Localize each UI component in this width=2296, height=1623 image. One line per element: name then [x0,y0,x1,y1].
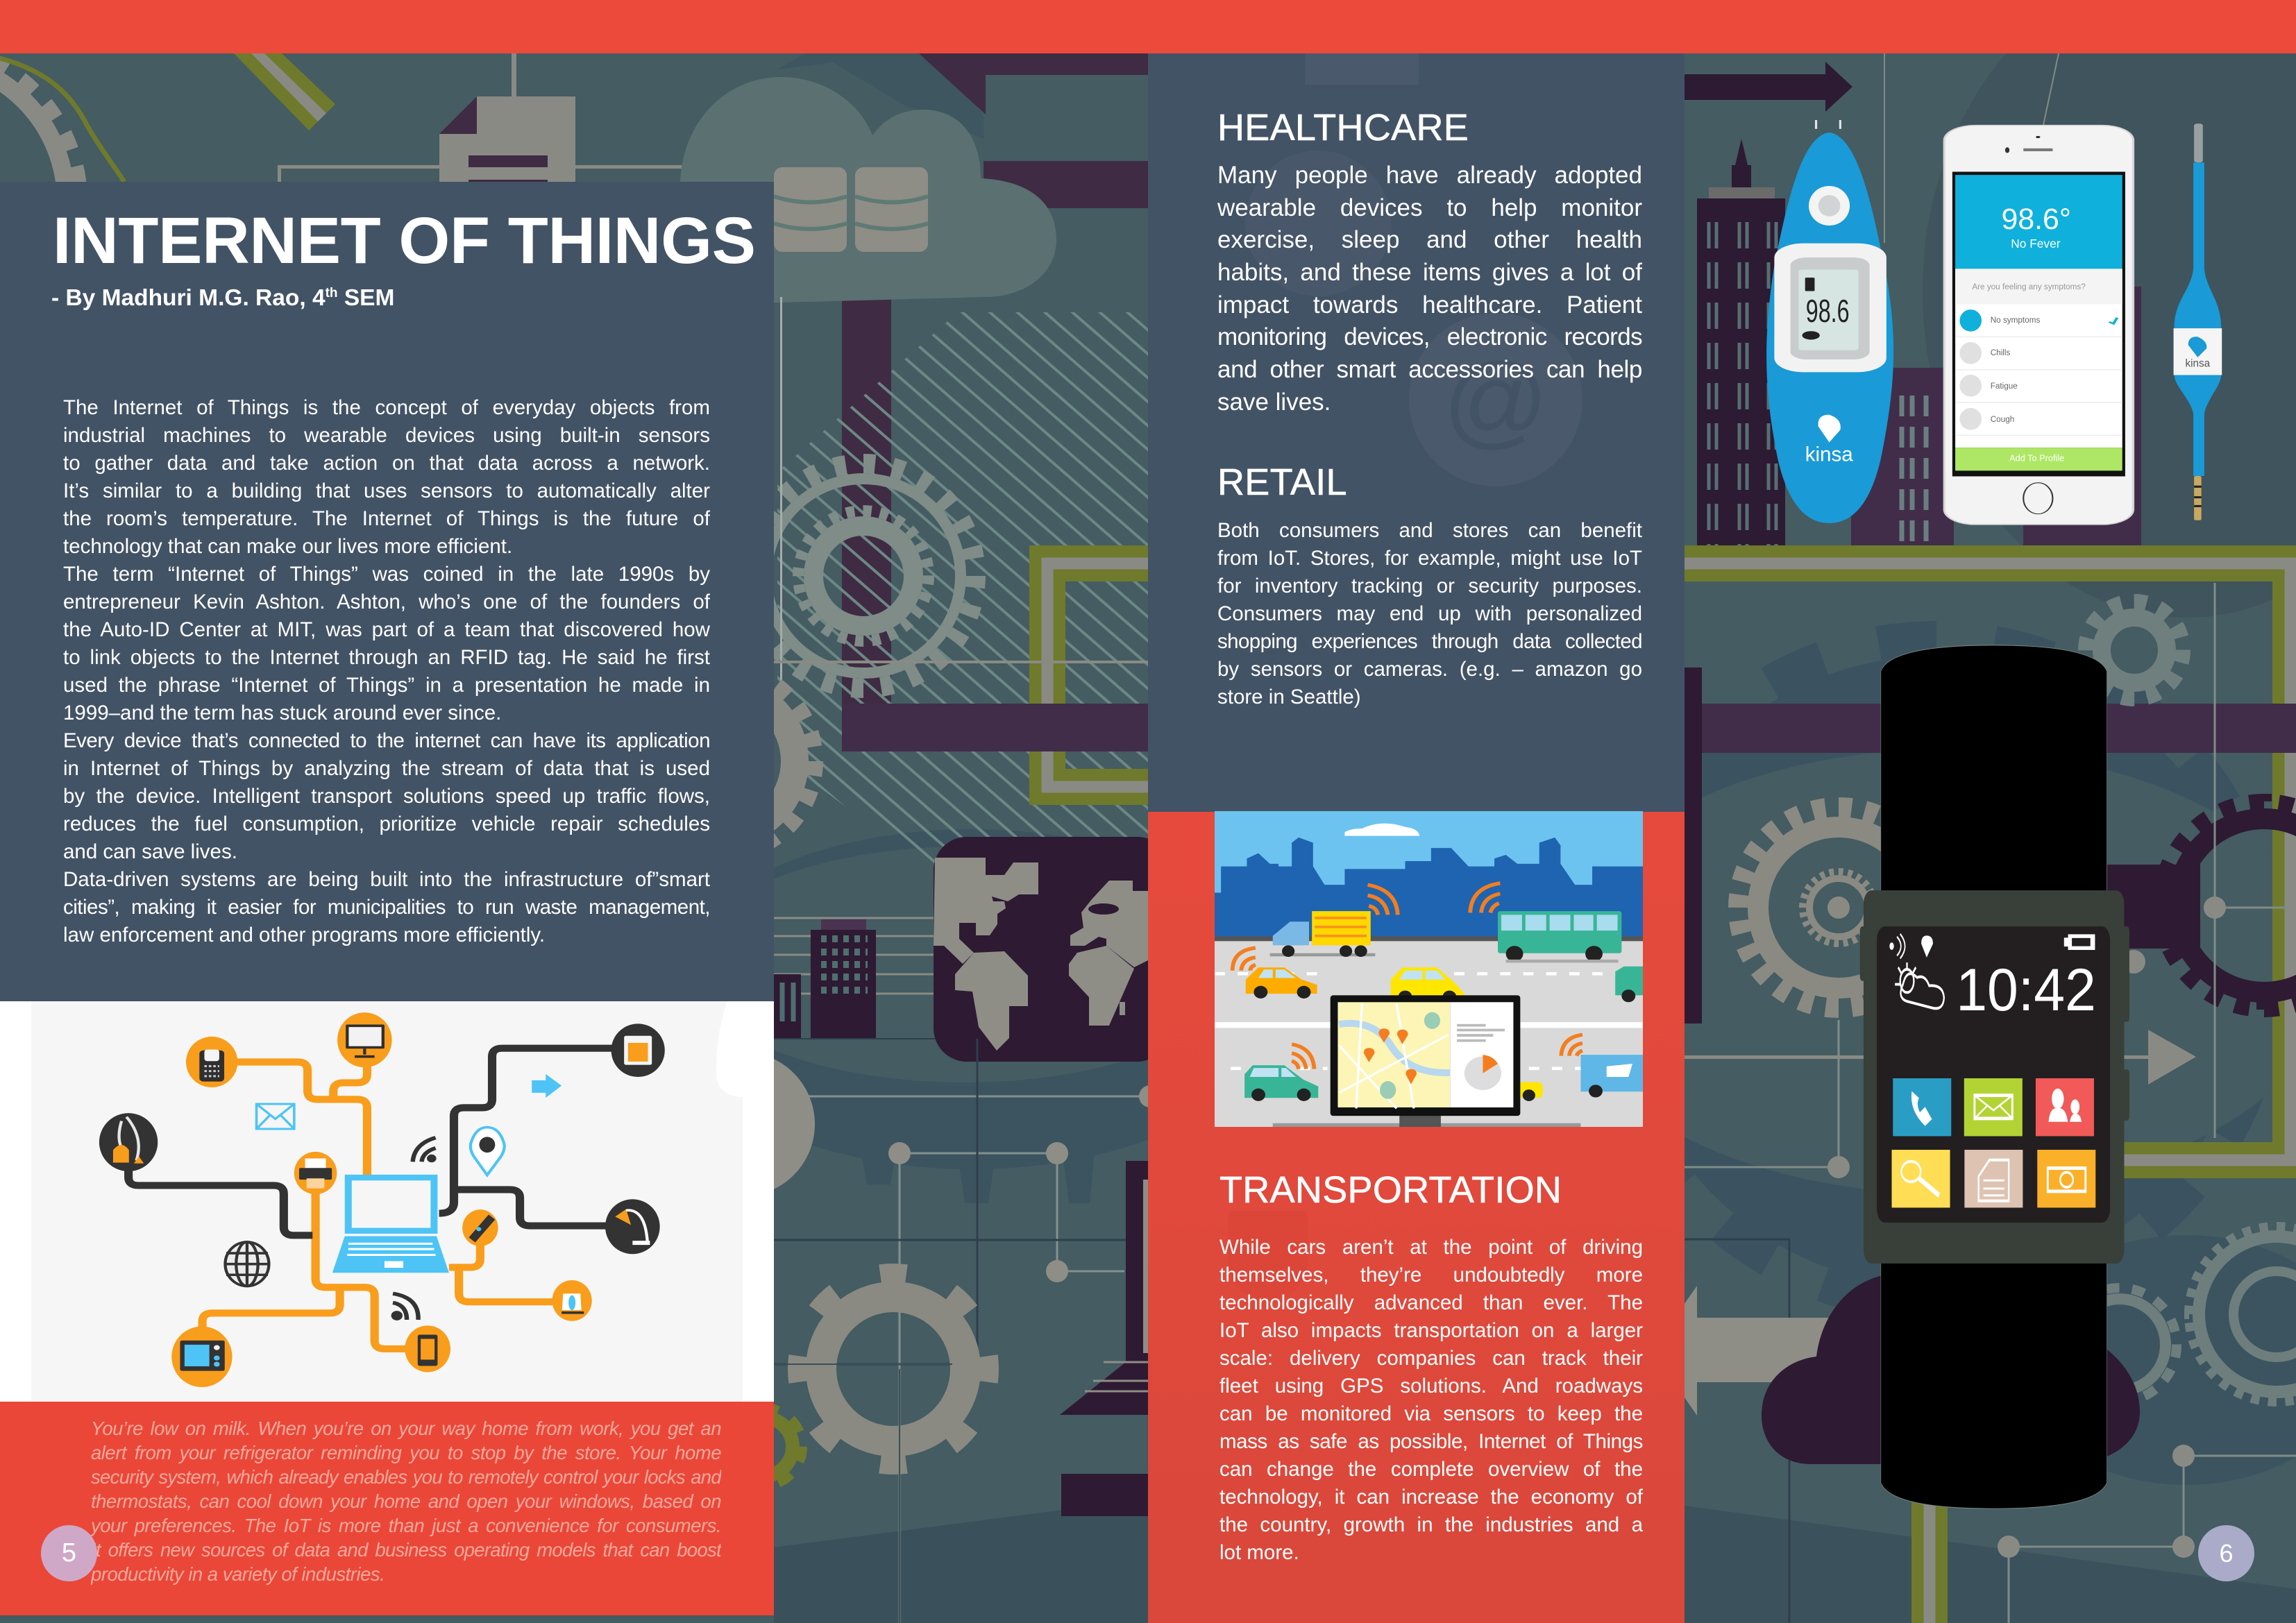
transportation text: themselves, they’re undoubtedly more [1219,1264,1643,1286]
thermometer [1766,117,1893,523]
olive ribbon [234,53,335,130]
transportation text: can change the complete overview of the [1219,1458,1643,1481]
thermometer: kinsa [1805,443,1853,466]
icon: smartphone [405,1325,450,1372]
body text: by the device. Intelligent transport solutions speed up traffic flows, [63,785,710,808]
yellow car [1391,967,1464,1003]
transportation text: can be monitored via sensors to keep the [1219,1402,1643,1425]
body text: to gather data and take action on that data across a network. [63,452,710,475]
lower right network dots [1998,1445,2296,1623]
large laptop silhouette [1060,1161,1154,1516]
body text: cities”, making it easier for municipalities to run waste management, [63,896,710,919]
dark ground shapes [659,0,2296,1623]
healthcare text: save lives. [1217,389,1331,416]
transportation text: technologically advanced than ever. The [1219,1291,1643,1314]
purple cloud [1762,1273,2140,1464]
body text: the Auto-ID Center at MIT, was part of a team that discovered how [63,618,710,641]
heading: healthcare: HEALTHCARE [1217,107,1469,148]
phone: Cough [1991,415,2014,424]
panel: transportation [1148,812,1685,1623]
retail text: Consumers may end up with personalized [1217,602,1642,625]
time: 10:42 [1956,955,2096,1023]
body text: in Internet of Things by analyzing the stream of data that is used [63,757,710,780]
orange car [1246,967,1317,999]
cloud with database [680,53,1150,708]
weather icon [1895,962,1944,1008]
decorative lock shape [1305,53,1419,85]
centre gear [751,297,1151,751]
healthcare text [1217,162,1642,416]
page number 5 [41,1525,97,1581]
retail text: for inventory tracking or security purposes. [1217,575,1642,597]
healthcare text: and other smart accessories can help [1217,356,1642,383]
truck [1270,911,1375,957]
top red bar [0,0,2296,53]
panel: healthcare and retail [1148,53,1685,812]
heading: transportation: TRANSPORTATION [1219,1169,1562,1211]
probe thermometer: kinsa [2185,357,2211,369]
phone: 98.6° [2002,203,2071,236]
icon: kettle [552,1280,592,1321]
body text: The term “Internet of Things” was coined in the late 1990s by [63,563,710,586]
body text: reduces the fuel consumption, prioritize vehicle repair schedules [63,813,710,835]
icon: television [171,1327,232,1387]
transportation text: technology, it can increase the economy of [1219,1486,1643,1509]
icon: laptop [332,1178,449,1273]
lower-left partial gear [628,668,816,855]
icon: wifi arcs [413,1138,436,1162]
purple gear [2107,801,2296,1010]
phone: No symptoms [1991,316,2040,325]
right lines, dots and arrow [1685,583,2290,1178]
green van [1615,967,1643,1002]
phone: Are you feeling any symptoms? [1972,282,2086,291]
decorative at sign [1409,313,1582,486]
caption text: productivity in a variety of industries. [91,1563,385,1585]
icon: envelope [257,1104,294,1129]
map monitor [1273,995,1580,1128]
icon: blue arrow [532,1074,562,1098]
half circle [670,1052,815,1196]
caption text: your preferences. The IoT is more than just a convenience for consumers. [91,1515,721,1536]
transportation text: scale: delivery companies can track their [1219,1347,1643,1370]
decorative circle [1245,151,1391,296]
network dots and thin lines [774,1039,1161,1623]
transportation text: lot more. [1219,1541,1299,1564]
body text: The Internet of Things is the concept of everyday objects from [63,396,710,419]
body text: entrepreneur Kevin Ashton. Ashton, who’s one of the founders of [63,590,710,613]
olive cog fragment [725,1408,802,1486]
body text [63,396,710,946]
thermometer and phone app [1766,120,2222,525]
healthcare text: monitoring devices, electronic records [1217,323,1642,350]
icon: monitor [337,1012,392,1067]
top right arrow and city [1685,53,2141,545]
network diagram [31,1001,743,1402]
heading: retail: RETAIL [1217,461,1347,503]
transportation text: While cars aren’t at the point of driving [1219,1236,1643,1259]
panel: red caption [0,1402,774,1615]
status icons [1890,934,2095,958]
body text: It’s similar to a building that uses sensors to automatically alter [63,479,710,502]
phone: Add To Profile [2009,453,2064,464]
retail text: shopping experiences through data collected [1217,630,1642,653]
probe thermometer [2174,124,2222,520]
retail text [1217,519,1642,708]
page number 6 [2198,1525,2254,1581]
phone: Chills [1991,348,2010,357]
retail text: Both consumers and stores can benefit [1217,519,1642,542]
top right small gear [2086,602,2183,699]
body text: and can save lives. [63,840,237,863]
smart transport illustration [1215,811,1643,1127]
yellow car behind screen [1517,1082,1543,1101]
olive and grey frame, centre [1047,563,1152,787]
caption text: You’re low on milk. When you’re on your way home from work, you get an [91,1418,721,1439]
globe icon [934,837,1170,1062]
healthcare text: impact towards healthcare. Patient [1217,291,1642,318]
body text: law enforcement and other programs more efficiently. [63,924,545,946]
healthcare text: Many people have already adopted [1217,162,1642,189]
body text: industrial machines to wearable devices using built-in sensors [63,424,710,447]
phone: No Fever [2011,237,2061,250]
green car [1244,1065,1318,1101]
panel: introduction [0,182,774,1003]
transportation text: the country, growth in the industries and a [1219,1513,1643,1536]
icon: vacuum [99,1113,158,1171]
retail text: from IoT. Stores, for example, might use IoT [1217,547,1642,570]
icon: stove [611,1023,665,1077]
bus [1498,911,1621,962]
decorative at sign: @ [1443,341,1548,458]
body text: used the phrase “Internet of Things” in a presentation he made in [63,674,710,697]
body text: Data-driven systems are being built into the infrastructure of”smart [63,868,710,891]
body text: Every device that’s connected to the internet can have its application [63,729,710,752]
caption text [91,1418,721,1585]
title: INTERNET OF THINGS [53,204,756,278]
healthcare text: exercise, sleep and other health [1217,226,1642,253]
caption text: alert from your refrigerator reminding you to stop by the store. Your home [91,1442,721,1463]
retail text: store in Seattle) [1217,686,1361,708]
body text: to link objects to the Internet through an RFID tag. He said he first [63,646,710,669]
lower centre gear [774,1275,987,1623]
signal arcs [1233,883,1582,1069]
phone [1944,126,2134,525]
lower right gears [2063,1227,2296,1402]
right purple bars [1685,668,2296,1023]
healthcare text: habits, and these items gives a lot of [1217,259,1642,286]
body text: 1999–and the term has stuck around ever since. [63,702,501,724]
phone: Fatigue [1991,382,2018,391]
transportation text: mass as safe as possible, Internet of Things [1219,1430,1643,1453]
blue delivery van [1580,1055,1643,1098]
app tiles [1893,1078,1951,1136]
icon: globe [225,1242,269,1286]
icon: remote [462,1209,498,1246]
page number 5: 5 [62,1538,76,1567]
city lines and buildings [774,918,937,1039]
icon: desk phone [186,1037,237,1087]
retail text: by sensors or cameras. (e.g. – amazon go [1217,658,1642,681]
right side frame [1680,563,2290,1623]
right grey gear [1739,808,1939,1008]
byline: - By Madhuri M.G. Rao, 4th SEM [51,285,394,311]
caption text: thermostats, can cool down your home and open your windows, based on [91,1490,721,1512]
body text: the room’s temperature. The Internet of Things is the future of [63,507,710,530]
icon: printer [294,1152,337,1194]
image background: white frame [0,1001,774,1402]
transportation text: fleet using GPS solutions. And roadways [1219,1375,1643,1397]
transportation text: IoT also impacts transportation on a larger [1219,1319,1643,1342]
caption text: It offers new sources of data and business operating models that can boost [91,1539,721,1561]
hatched area [777,312,1148,872]
icon: rss [393,1293,419,1320]
top-left gear and olive curve [0,44,124,358]
icon: lamp [605,1199,660,1254]
page number 6: 6 [2219,1539,2234,1567]
transportation text [1219,1236,1643,1564]
healthcare text: wearable devices to help monitor [1217,194,1642,221]
thin frame and grey left arrow [1652,1239,1834,1623]
file icon with connector lines [278,53,687,187]
decorative shield [1228,1211,1308,1301]
smartwatch [1860,645,2129,1509]
body text: technology that can make our lives more efficient. [63,535,512,558]
caption text: security system, which already enables you to remotely control your locks and [91,1466,721,1488]
icon: location pin [471,1128,505,1175]
thermometer: 98.6 [1806,294,1850,329]
